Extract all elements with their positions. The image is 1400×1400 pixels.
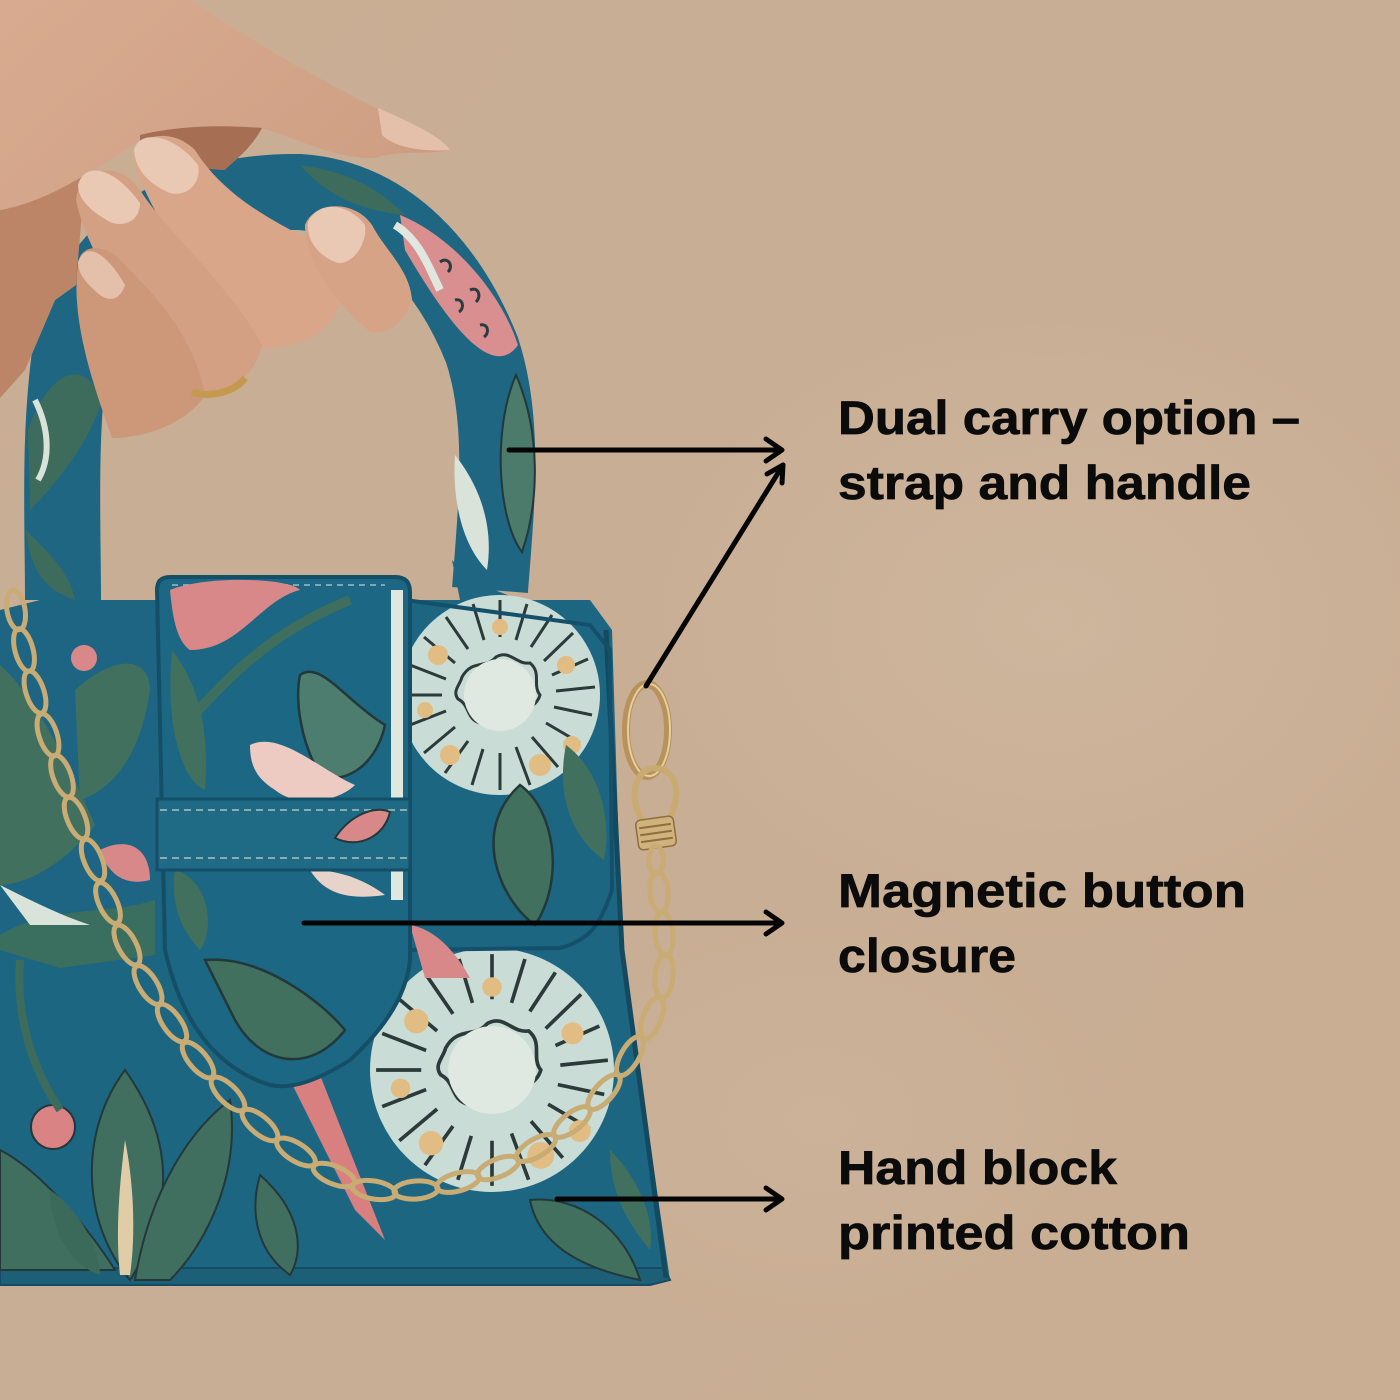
label: magnetic closure: [838, 864, 1246, 982]
label: magnetic closure: Magnetic button: [838, 864, 1246, 917]
belt loop: [157, 799, 410, 870]
fingers: [135, 136, 340, 348]
label: magnetic closure: closure: [838, 929, 1016, 982]
metal ring: [626, 684, 670, 776]
label: dual carry: Dual carry option –: [838, 391, 1300, 444]
arrow: magnetic closure: [304, 912, 782, 934]
centre strap: [157, 577, 410, 1086]
arrows: [304, 439, 783, 1210]
handle: [26, 165, 600, 650]
label: printed cotton: Hand block: [838, 1141, 1118, 1194]
clasp: [634, 768, 677, 850]
arrow: handle: [509, 439, 782, 461]
fabric leaves: [0, 745, 651, 1280]
bag body: [0, 600, 670, 1285]
front flap: [0, 600, 612, 978]
label: dual carry: [838, 391, 1300, 509]
label: printed cotton: printed cotton: [838, 1206, 1190, 1259]
label: printed cotton: [838, 1141, 1190, 1259]
gold chain: [4, 589, 675, 1203]
arrow: fabric: [557, 1188, 782, 1210]
ring: [192, 378, 245, 394]
hand: [0, 0, 450, 438]
arrow: ring: [646, 465, 783, 686]
upper flower: [400, 595, 600, 795]
lower flower: [370, 948, 614, 1192]
bag illustration: [0, 0, 677, 1285]
fingernails: [134, 137, 199, 194]
label: dual carry: strap and handle: [838, 456, 1251, 509]
